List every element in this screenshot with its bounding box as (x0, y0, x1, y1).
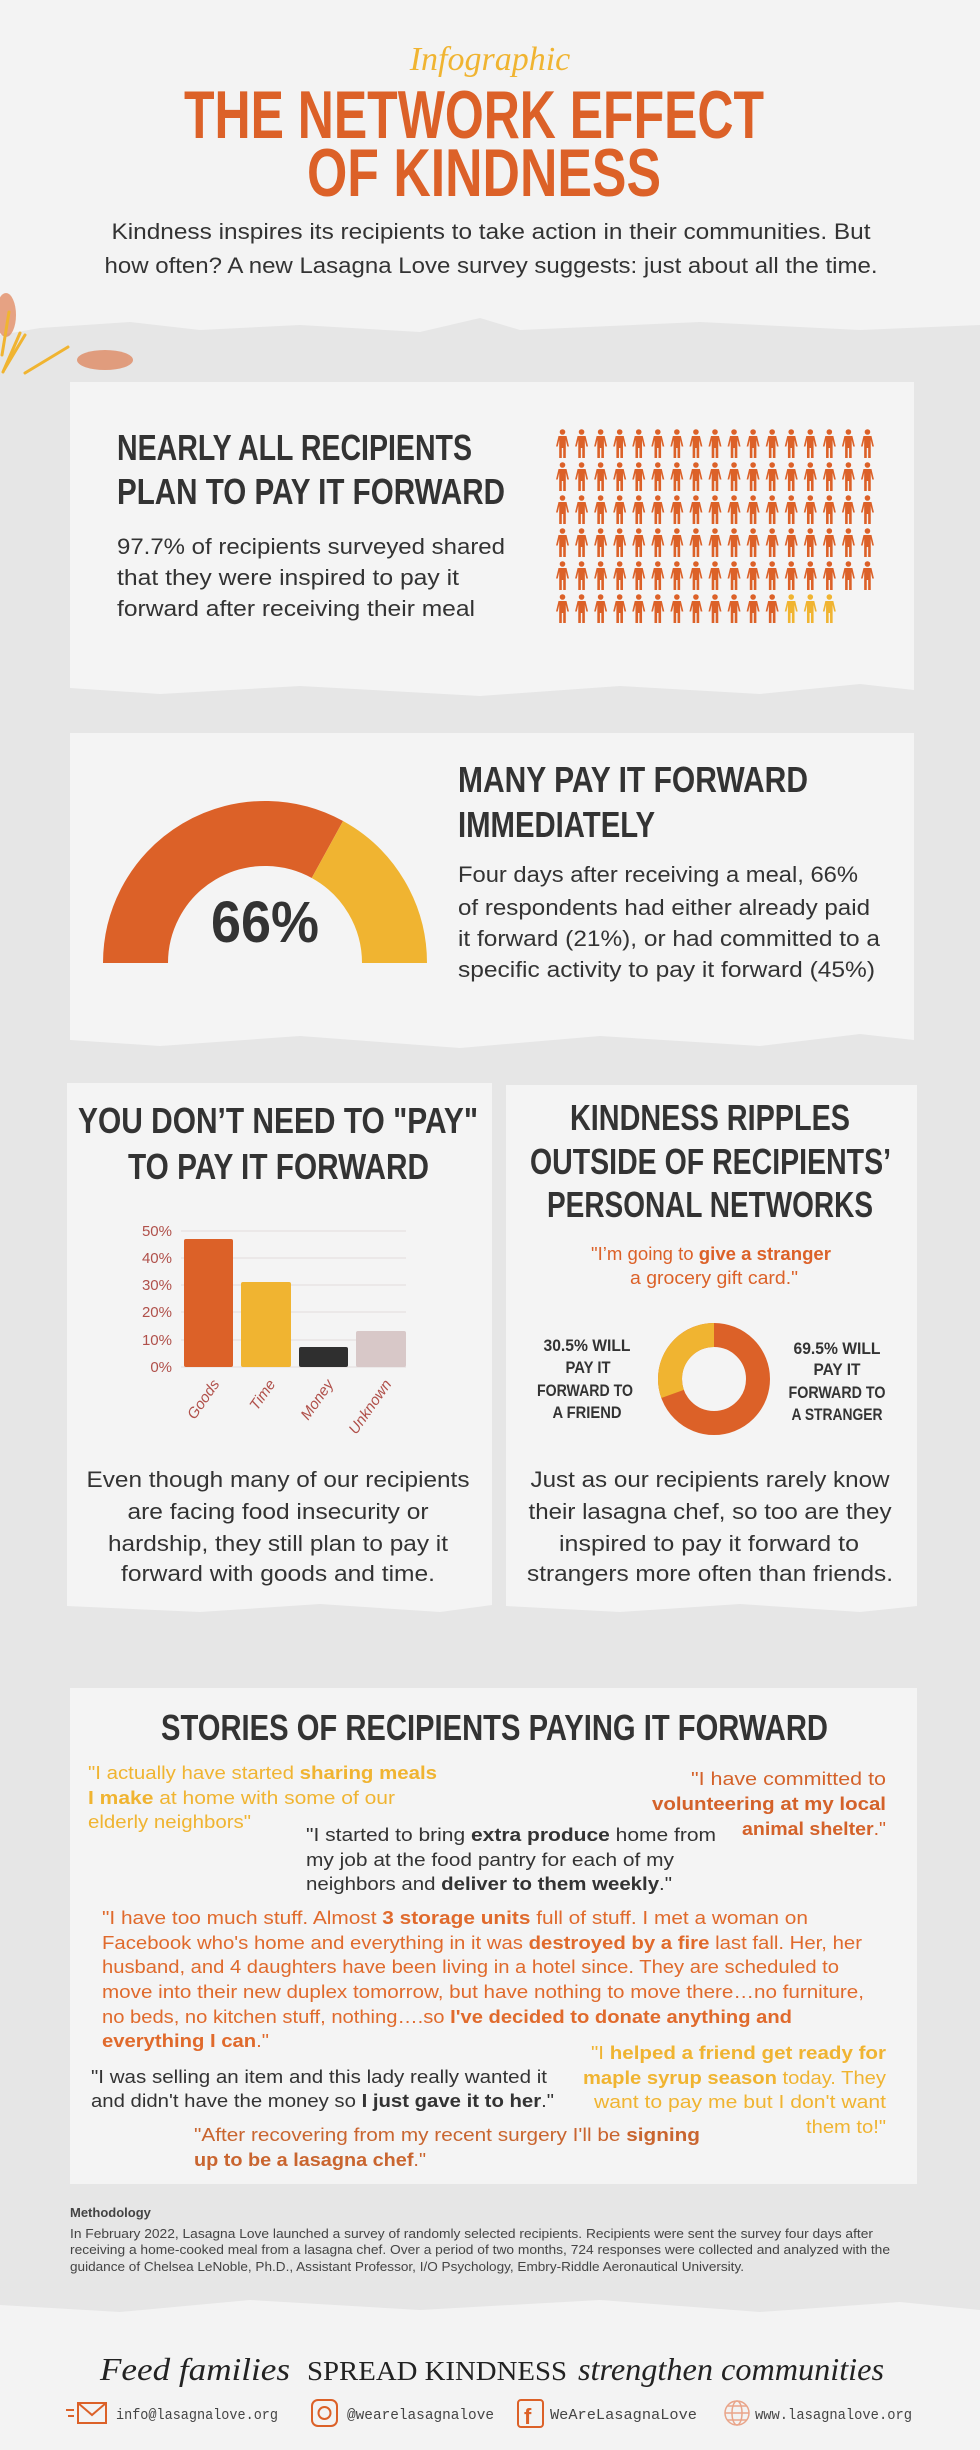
quote: stranger gift card: a grocery gift card." (630, 1268, 798, 1288)
bar chart: 0% (150, 1359, 172, 1376)
quote: maple syrup: maple syrup season today. They (583, 2068, 886, 2088)
heading: nearly all recipients: PLAN TO PAY IT FORWARD (117, 471, 505, 512)
quote: gave it to her: and didn't have the money so I just gave it to her ." (91, 2091, 554, 2111)
heading: kindness ripples (530, 1097, 891, 1225)
bar chart (142, 1223, 406, 1438)
quote: storage units: no beds, no kitchen stuff, nothing….so I've decided to donate anything and (102, 2007, 792, 2027)
quote: sharing meals (88, 1763, 437, 1832)
label: 69.5% stranger: 69.5% WILL (794, 1339, 880, 1358)
methodology: Methodology (70, 2205, 152, 2220)
text: even though (86, 1467, 469, 1586)
title (184, 77, 764, 211)
heading: you don't need to pay: TO PAY IT FORWARD (128, 1146, 429, 1187)
footer tagline: Feed families (99, 2351, 290, 2387)
panel: you don't need to pay (67, 1083, 492, 1612)
footer contacts: WeAreLasagnaLove (550, 2407, 697, 2424)
footer contacts: @wearelasagnalove (347, 2407, 494, 2424)
heading: kindness ripples: OUTSIDE OF RECIPIENTS’ (530, 1141, 891, 1182)
heading: kindness ripples: KINDNESS RIPPLES (570, 1097, 850, 1138)
title: THE NETWORK EFFECT (184, 77, 764, 153)
heading: you don't need to pay (78, 1100, 478, 1187)
bar chart: Goods (184, 1376, 224, 1423)
quote: storage units: "I have too much stuff. Almost 3 storage units full of stuff. I met a woman on (102, 1908, 808, 1928)
label: 30.5% friend: FORWARD TO (537, 1381, 633, 1400)
quote: gave it to her: "I was selling an item and this lady really wanted it (91, 2067, 547, 2087)
methodology: guidance of Chelsea LeNoble, Ph.D., Assistant Professor, I/O Psychology, Embry-Riddle Aeronautical University. (70, 2260, 744, 2274)
heading: nearly all recipients: NEARLY ALL RECIPIENTS (117, 427, 472, 468)
footer contacts: www.lasagnalove.org (755, 2407, 912, 2424)
text: four days: of respondents had either already paid (458, 895, 870, 920)
quote: gave it to her (91, 2067, 554, 2111)
text: four days: Four days after receiving a meal, 66% (458, 862, 858, 887)
label: 30.5% friend: 30.5% WILL (544, 1336, 630, 1355)
label: 69.5% stranger (788, 1339, 886, 1424)
methodology: receiving a home-cooked meal from a lasagna chef. Over a period of two months, 724 responses were collected and analyzed with the (70, 2243, 890, 2257)
text: four days (458, 862, 881, 982)
text: 97.7%: that they were inspired to pay it (117, 565, 459, 590)
text: even though: forward with goods and time. (121, 1561, 435, 1586)
quote: stranger gift card: "I’m going to give a stranger (591, 1244, 831, 1264)
label: 30.5% friend: PAY IT (566, 1358, 611, 1377)
footer contacts (66, 2400, 912, 2429)
bar chart: 20% (142, 1304, 172, 1321)
quote: storage units (102, 1908, 864, 2051)
label: 30.5% friend (537, 1336, 633, 1422)
quote: sharing meals: elderly neighbors" (88, 1812, 251, 1832)
quote: extra produce: neighbors and deliver to them weekly ." (306, 1874, 672, 1894)
quote: stranger gift card (591, 1244, 831, 1288)
footer contacts: info@lasagnalove.org (116, 2407, 278, 2424)
panel: many pay it forward immediately (70, 733, 914, 1048)
heading: you don't need to pay: YOU DON’T NEED TO "PAY" (78, 1100, 478, 1141)
text: even though: Even though many of our recipients (86, 1467, 469, 1492)
subtitle (104, 219, 878, 278)
footer tagline: SPREAD KINDNESS (307, 2356, 567, 2386)
quote: sharing meals: I make at home with some of our (88, 1788, 395, 1808)
quote: animal shelter: animal shelter ." (742, 1819, 886, 1839)
quote: storage units: everything I can ." (102, 2031, 269, 2051)
panel: stories (70, 1688, 917, 2184)
methodology: In February 2022, Lasagna Love launched a survey of randomly selected recipients. Recipients were sent the survey four days after (70, 2227, 873, 2241)
quote: extra produce: "I started to bring extra produce home from (306, 1825, 716, 1845)
text: just as our recipients (527, 1467, 893, 1586)
gauge chart 66%: 66% (211, 890, 319, 955)
label: 30.5% friend: A FRIEND (552, 1403, 622, 1422)
text: even though: hardship, they still plan to pay it (108, 1531, 448, 1556)
bar chart: 10% (142, 1332, 172, 1349)
quote: maple syrup: "I helped a friend get ready for (591, 2043, 886, 2063)
quote: extra produce (306, 1825, 716, 1894)
icon grid: people (556, 429, 874, 623)
bar chart: Money (298, 1375, 338, 1423)
heading: kindness ripples: PERSONAL NETWORKS (547, 1184, 873, 1225)
quote: storage units: move into their new duplex tomorrow, but have nothing to move there…no furniture, (102, 1982, 864, 2002)
panel: kindness ripples (506, 1085, 917, 1612)
text: 97.7%: 97.7% of recipients surveyed shared (117, 534, 505, 559)
quote: maple syrup (583, 2043, 886, 2137)
text: just as our recipients: strangers more often than friends. (527, 1561, 893, 1586)
quote: maple syrup: them to!" (806, 2117, 886, 2137)
bar chart: Unknown (345, 1377, 395, 1438)
bar chart: 30% (142, 1277, 172, 1294)
header: infographic label: Infographic (409, 41, 570, 78)
text: four days: specific activity to pay it forward (45%) (458, 957, 875, 982)
text: 97.7% (117, 534, 505, 621)
text: just as our recipients: Just as our recipients rarely know (530, 1467, 890, 1492)
quote: extra produce: my job at the food pantry for each of my (306, 1850, 674, 1870)
heading: many pay it forward (458, 759, 808, 845)
text: just as our recipients: their lasagna chef, so too are they (528, 1499, 892, 1524)
quote: storage units: husband, and 4 daughters have been living in a hotel since. They are scheduled to (102, 1957, 839, 1977)
quote: animal shelter: "I have committed to (691, 1769, 886, 1789)
title: OF KINDNESS (307, 135, 661, 211)
icon: facebook (518, 2400, 543, 2429)
quote: animal shelter: volunteering at my local (652, 1794, 886, 1814)
quote: storage units: Facebook who's home and everything in it was destroyed by a fire last fall. Her, her (102, 1933, 862, 1953)
icon: globe (725, 2401, 749, 2425)
gauge chart 66% (136, 833, 394, 963)
footer tagline: strengthen communities (578, 2351, 884, 2387)
methodology (70, 2205, 890, 2274)
quote: maple syrup: want to pay me but I don't want (593, 2092, 886, 2112)
quote: lasagna chef (194, 2125, 700, 2170)
icon: facebook: f (524, 2404, 532, 2429)
quote: lasagna chef: "After recovering from my recent surgery I'll be signing (194, 2125, 700, 2145)
heading: many pay it forward: MANY PAY IT FORWARD (458, 759, 808, 800)
label: 69.5% stranger: A STRANGER (792, 1405, 882, 1424)
bar chart: 40% (142, 1250, 172, 1267)
quote: animal shelter (652, 1769, 886, 1839)
text: 97.7%: forward after receiving their meal (117, 596, 475, 621)
quote: sharing meals: "I actually have started sharing meals (88, 1763, 437, 1783)
footer tagline (99, 2351, 884, 2387)
label: 69.5% stranger: PAY IT (814, 1360, 861, 1379)
text: four days: it forward (21%), or had committed to a (458, 926, 881, 951)
label: 69.5% stranger: FORWARD TO (788, 1383, 886, 1402)
quote: lasagna chef: up to be a lasagna chef ." (194, 2150, 426, 2170)
icon: envelope (66, 2403, 106, 2423)
text: just as our recipients: inspired to pay it forward to (559, 1531, 859, 1556)
heading: many pay it forward: IMMEDIATELY (458, 804, 655, 845)
bar chart: Time (246, 1377, 279, 1413)
decoration: brush strokes (0, 293, 133, 373)
donut chart (670, 1335, 758, 1423)
heading: stories: STORIES OF RECIPIENTS PAYING IT FORWARD (161, 1707, 828, 1748)
subtitle: Kindness inspires its recipients to take action in their communities. But (112, 219, 870, 244)
panel: nearly all recipients (70, 382, 914, 696)
heading: nearly all recipients (117, 427, 505, 512)
text: even though: are facing food insecurity or (128, 1499, 428, 1524)
subtitle: how often? A new Lasagna Love survey suggests: just about all the time. (104, 253, 878, 278)
icon: instagram (312, 2400, 337, 2426)
bar chart: 50% (142, 1223, 172, 1240)
